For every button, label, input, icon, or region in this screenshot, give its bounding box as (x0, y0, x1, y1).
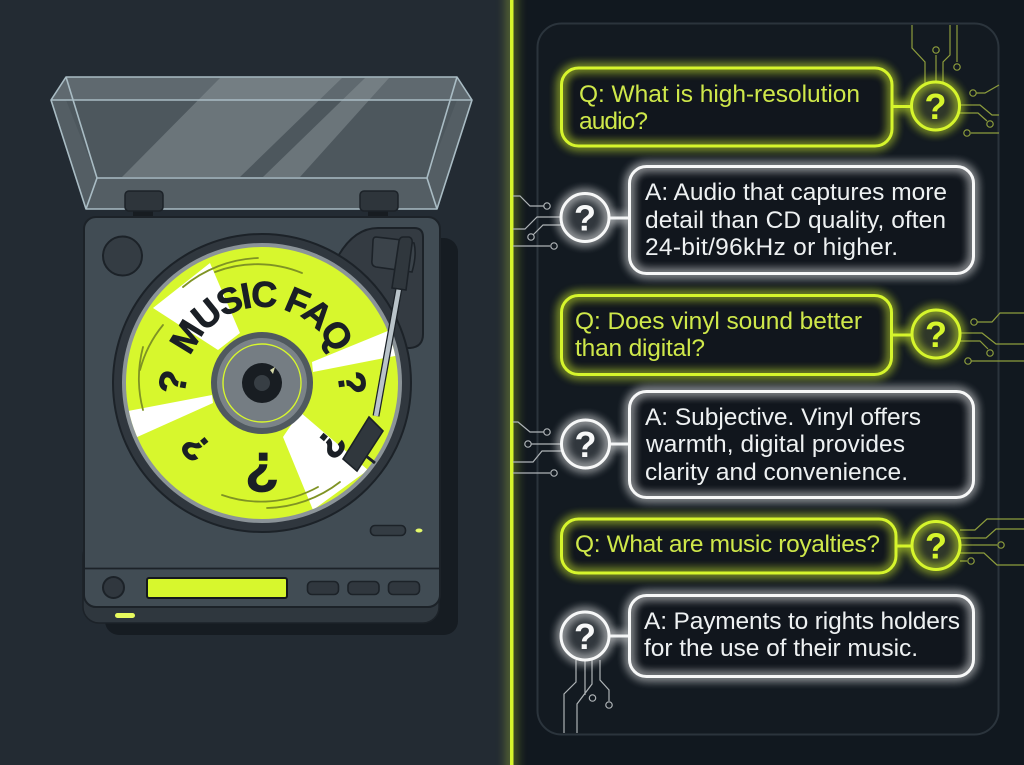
question text 1: Q: What is high-resolution (579, 81, 860, 108)
question mark lower right: ? (307, 421, 354, 466)
question mark lower left: ? (173, 424, 220, 469)
circuit traces Q2 (960, 313, 1024, 364)
turntable body (84, 217, 440, 607)
button 2 (348, 582, 379, 594)
answer text 3: A: Payments to rights holders (644, 608, 960, 635)
left hinge (125, 191, 163, 216)
lid reflection thin (263, 78, 389, 177)
answer text 3: for the use of their music. (644, 635, 918, 662)
answer text 1: A: Audio that captures more (645, 179, 947, 206)
question bubble 3 (562, 519, 896, 573)
answer text 1: 24-bit/96kHz or higher. (645, 234, 898, 261)
question icon 1: ? (924, 86, 946, 127)
answer bubble 3 (630, 596, 974, 676)
connector Q2 (892, 334, 912, 336)
counterweight (372, 237, 415, 272)
connector A1 (609, 216, 629, 220)
small pill button (370, 526, 406, 536)
circuit traces A1 (513, 196, 561, 249)
circuit traces Q3 (960, 519, 1024, 565)
white reflection wedges (128, 263, 400, 510)
answer icon 2: ? (574, 424, 596, 465)
corner knob (103, 236, 142, 276)
button 3 (388, 582, 420, 594)
answer icon 3: ? (574, 616, 596, 657)
connector A2 (609, 442, 629, 446)
answer text 2: clarity and convenience. (645, 459, 908, 486)
lid inner panel (66, 100, 457, 178)
answer text 1: detail than CD quality, often (645, 207, 946, 234)
question text 1: audio? (579, 108, 648, 135)
question text 2: than digital? (575, 335, 705, 362)
answer text 2: A: Subjective. Vinyl offers (645, 404, 921, 431)
question bubble 1 (562, 68, 892, 146)
question text 3: Q: What are music royalties? (575, 531, 880, 558)
title: MUSIC FAQ: MUSIC FAQ (169, 281, 350, 355)
turntable base (83, 540, 439, 623)
right background (511, 0, 1024, 765)
platter (112, 233, 412, 533)
question icon 1 (912, 82, 960, 130)
panel: FAQ frame (538, 24, 998, 734)
status LED (416, 528, 422, 532)
answer text 2: warmth, digital provides (645, 431, 905, 458)
tonearm (343, 237, 415, 471)
answer icon 1: ? (574, 198, 596, 238)
groove arcs (139, 258, 340, 508)
turntable shadow (105, 238, 458, 635)
question bubble 2 (562, 296, 892, 374)
power LED (115, 613, 135, 618)
answer 1 group (513, 166, 974, 274)
answer bubble 2 (630, 392, 974, 498)
answer icon 2 (562, 420, 610, 468)
question mark left: ? (151, 367, 197, 397)
question mark bottom: ? (245, 441, 279, 504)
vertical neon divider (510, 0, 514, 765)
round knob (103, 577, 124, 598)
answer bubble 1 (630, 166, 974, 274)
platter ring (113, 234, 411, 532)
question icon 3: ? (925, 526, 947, 566)
question 1 group (562, 25, 999, 146)
right hinge (360, 191, 398, 216)
question mark right: ? (329, 369, 373, 398)
left background (0, 0, 511, 765)
lid shell (51, 77, 472, 209)
arm pivot (392, 237, 412, 290)
lid top strip (51, 77, 472, 100)
button 1 (308, 582, 338, 594)
answer 3 group (561, 596, 974, 733)
lime display (147, 578, 287, 598)
question icon 2 (912, 310, 960, 358)
dust cover (51, 77, 472, 216)
turntable (50, 76, 473, 635)
lid reflection (122, 78, 342, 177)
circuit traces A3 (564, 660, 612, 733)
question icon 3 (912, 522, 960, 570)
tonearm base plate (335, 228, 423, 348)
answer icon 1 (561, 194, 609, 242)
panel divider (84, 568, 440, 570)
question icon 2: ? (925, 314, 947, 355)
platter rim (122, 243, 402, 523)
question text 2: Q: Does vinyl sound better (575, 308, 862, 335)
connector Q3 (896, 544, 912, 548)
headshell (343, 417, 383, 471)
circuit traces A2 (513, 422, 561, 476)
circuit traces Q1 (912, 25, 999, 136)
question 2 group (562, 296, 1024, 374)
record label disc (126, 247, 398, 519)
answer icon 3 (561, 612, 609, 660)
question 3 group (562, 519, 1024, 573)
centre hub (211, 332, 313, 434)
connector A3 (609, 634, 629, 638)
stylus (366, 456, 375, 463)
connector Q1 (892, 105, 912, 108)
lid outlines (51, 77, 472, 209)
answer 2 group (513, 392, 974, 498)
metal arm tube (376, 288, 399, 416)
